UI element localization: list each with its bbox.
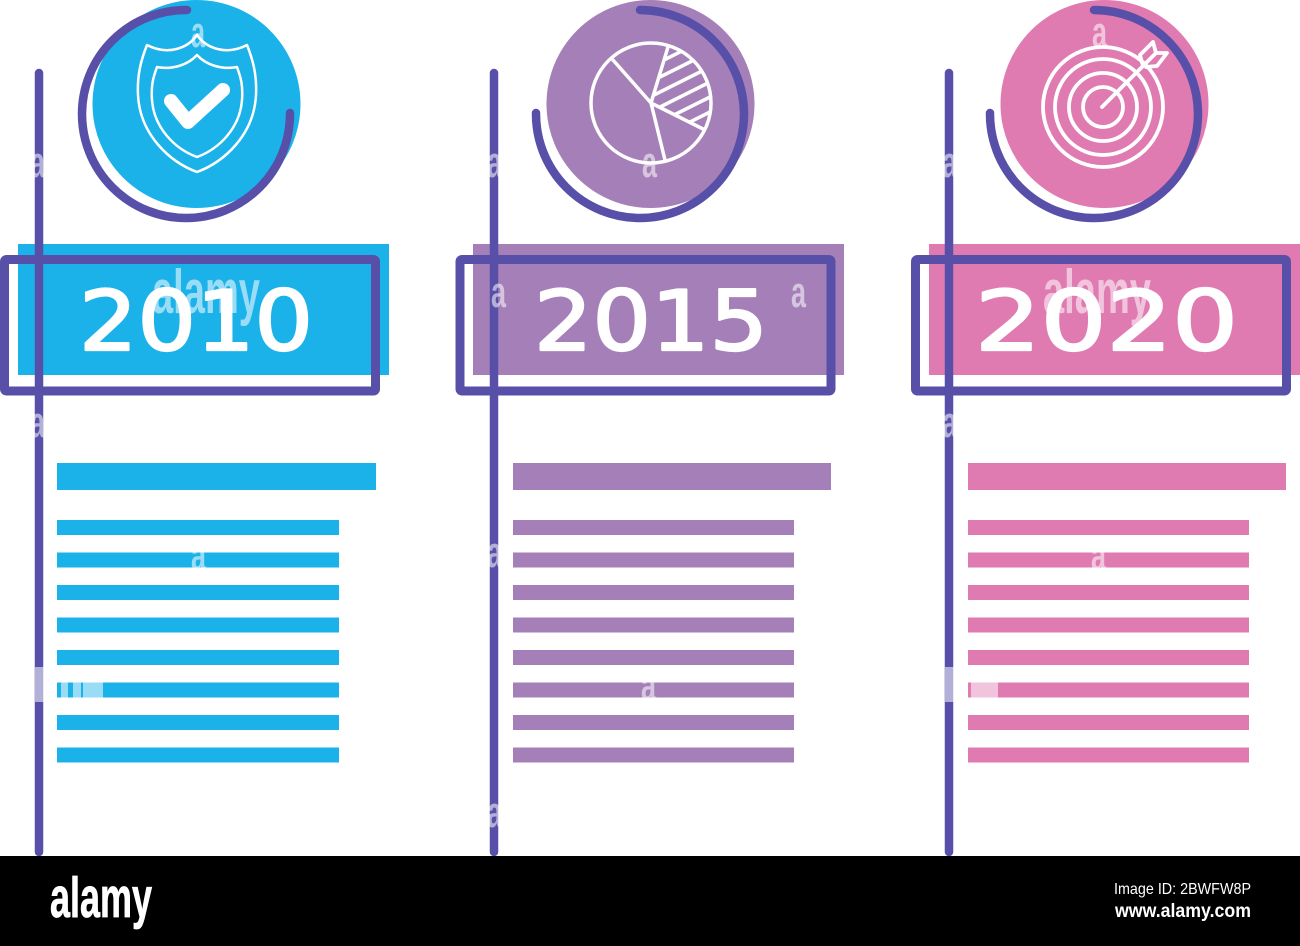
panel: 2010 column — [4, 0, 389, 852]
year banner fill — [929, 244, 1300, 375]
year banner fill — [18, 244, 389, 375]
vertical timeline line — [490, 73, 498, 852]
heading bar — [57, 463, 376, 490]
watermarks: alamy — [1043, 258, 1151, 327]
watermarks: a — [487, 528, 502, 577]
watermarks: a — [191, 531, 206, 580]
heading bar — [513, 463, 831, 490]
year label 2020: 2020 — [975, 273, 1238, 370]
year banner outline — [4, 260, 376, 391]
watermarks: a — [942, 138, 957, 187]
watermarks: a — [1091, 531, 1106, 580]
icon: purple circle with pie chart — [546, 0, 754, 208]
footer url: www.alamy.com — [1114, 901, 1251, 922]
watermarks: a — [942, 398, 957, 447]
heading bar — [968, 463, 1286, 490]
panel: 2015 column — [460, 0, 844, 852]
watermarks: a — [642, 138, 657, 187]
watermarks: a — [791, 268, 806, 317]
watermarks: a — [487, 788, 502, 837]
footer logo: alamy — [50, 866, 152, 930]
watermarks: a — [30, 398, 45, 447]
year banner outline — [460, 260, 831, 391]
watermarks — [30, 8, 1151, 837]
footer image id: Image ID: 2BWFW8P — [1114, 881, 1251, 898]
year banner fill — [473, 244, 844, 375]
icon: open ring arc — [82, 10, 290, 218]
watermarks: a — [191, 8, 205, 57]
text lines — [57, 520, 339, 762]
icon: open ring arc — [990, 10, 1198, 218]
footer bar — [0, 856, 1300, 946]
text lines — [513, 520, 794, 762]
year label 2015: 2015 — [534, 273, 768, 370]
vertical timeline line — [35, 73, 43, 852]
watermarks: a — [1092, 8, 1107, 57]
watermarks: a — [491, 268, 506, 317]
year banner outline — [916, 260, 1286, 391]
watermarks: a — [641, 661, 656, 710]
watermarks: a — [30, 138, 45, 187]
icon: pink circle with target — [1000, 0, 1208, 208]
watermarks: a — [487, 138, 502, 187]
vertical timeline line — [945, 73, 953, 852]
watermarks: alamy — [152, 258, 260, 327]
text lines — [968, 520, 1249, 762]
year label 2010: 2010 — [79, 273, 313, 370]
icon: blue circle with shield — [92, 0, 300, 208]
icon: open ring arc — [536, 10, 744, 218]
panel: 2020 column — [916, 0, 1300, 852]
